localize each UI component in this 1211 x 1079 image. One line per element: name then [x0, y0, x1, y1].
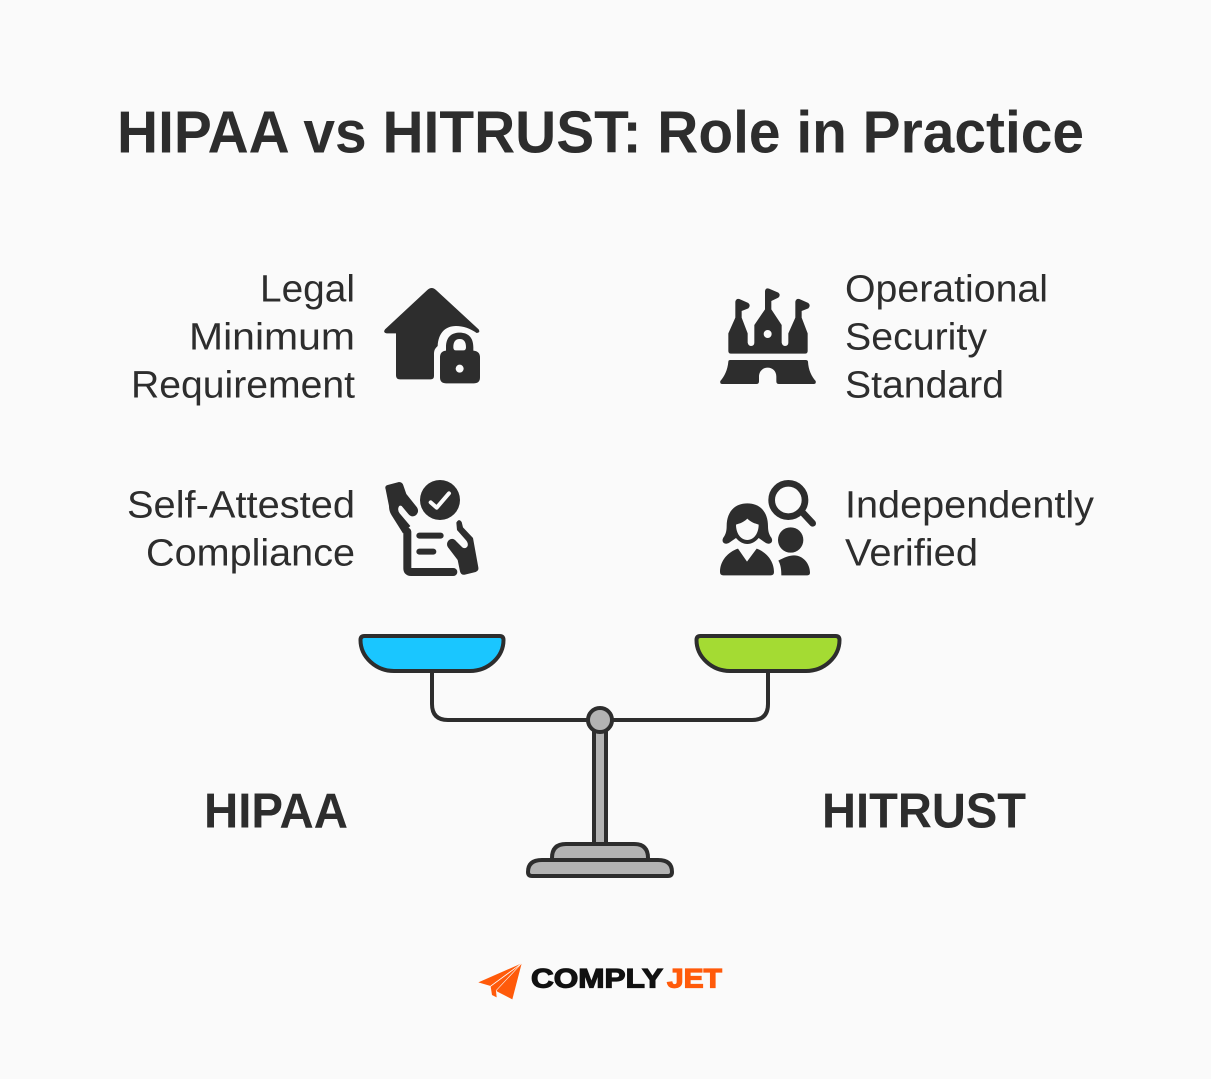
scale stand post — [594, 728, 606, 844]
text block: operational security standard: Security — [845, 316, 987, 358]
text block: legal minimum requirement: Minimum — [189, 316, 355, 358]
left pan: HIPAA — [360, 636, 504, 671]
icon: paper plane — [478, 963, 522, 999]
text block: legal minimum requirement: Requirement — [131, 364, 355, 406]
balance scale — [360, 636, 840, 876]
text block: legal minimum requirement: Legal — [260, 268, 355, 310]
scale stand base — [528, 844, 672, 876]
title: HIPAA vs HITRUST: Role in Practice — [117, 100, 1084, 166]
text block: self-attested compliance: Compliance — [146, 532, 355, 574]
icon: people with magnifier — [720, 483, 813, 575]
scale beam — [432, 671, 768, 720]
text block: operational security standard: Operational — [845, 268, 1048, 310]
logo wordmark: JET — [667, 964, 723, 994]
text block: self-attested compliance — [127, 484, 355, 574]
scale pivot — [588, 708, 612, 732]
text block: operational security standard: Standard — [845, 364, 1004, 406]
text block: independently verified: Independently — [845, 484, 1094, 526]
logo: ComplyJet — [478, 963, 723, 999]
right pan: HITRUST — [696, 636, 840, 671]
label: HIPAA: HIPAA — [204, 784, 348, 838]
text block: independently verified — [845, 484, 1094, 574]
text block: self-attested compliance: Self-Attested — [127, 484, 355, 526]
icon: castle — [720, 288, 816, 384]
text block: legal minimum requirement — [131, 268, 355, 406]
logo wordmark: COMPLY — [531, 964, 663, 994]
text block: operational security standard — [845, 268, 1048, 406]
icon: hands holding checked document — [385, 480, 478, 575]
text block: independently verified: Verified — [845, 532, 978, 574]
icon: house with padlock — [384, 288, 480, 383]
label: HITRUST: HITRUST — [822, 784, 1026, 838]
